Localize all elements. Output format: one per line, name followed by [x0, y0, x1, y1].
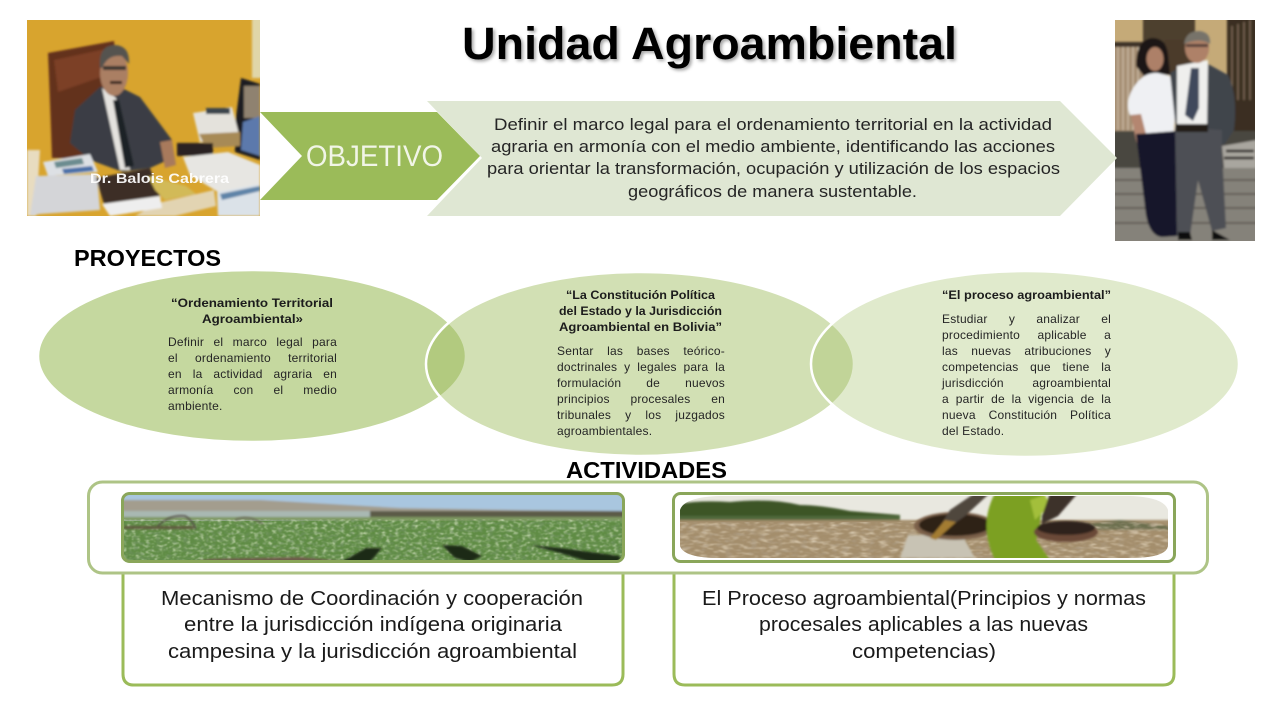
- man: [1170, 64, 1235, 145]
- activity 2 text: competencias): [852, 641, 996, 663]
- project 1 heading: [171, 298, 333, 326]
- project 1 description: Definir el marco legal para: [168, 335, 337, 349]
- hand: [160, 140, 176, 168]
- face and hair: [100, 50, 128, 96]
- heading: PROYECTOS: PROYECTOS: [74, 245, 221, 271]
- activity 1 text: campesina y la jurisdicción agroambiental: [168, 641, 577, 663]
- activity 1 text: entre la jurisdicción indígena originaria: [184, 614, 563, 636]
- project 2 description: tribunales y los juzgados: [557, 408, 725, 422]
- woman: [1136, 38, 1170, 76]
- arrow: OBJETIVO chevron: [260, 112, 480, 200]
- project 1 description: [168, 335, 337, 413]
- project 1 heading: Agroambiental»: [202, 314, 303, 326]
- crop texture: [122, 519, 624, 562]
- project 1 description: en la actividad agraria en: [168, 367, 337, 381]
- chair: [48, 41, 116, 160]
- project 2 heading: Agroambiental en Bolivia”: [559, 322, 722, 334]
- heading: ACTIVIDADES: ACTIVIDADES: [566, 457, 727, 483]
- project 2 description: Sentar las bases teórico-: [557, 344, 725, 358]
- photo: irrigated crop field: [122, 493, 624, 562]
- soil texture: [678, 522, 1170, 560]
- project 3 description: a partir de la vigencia de la: [942, 392, 1111, 406]
- project 1 description: el ordenamiento territorial: [168, 351, 337, 365]
- arrow: objective description: [427, 101, 1117, 216]
- project 3 description: las nuevas atribuciones y: [942, 344, 1111, 358]
- objective text: geográficos de manera sustentable.: [628, 182, 917, 201]
- project 3 description: competencias que tiene la: [942, 360, 1111, 374]
- project 3 description: nueva Constitución Política: [942, 408, 1111, 422]
- side papers: [193, 107, 240, 142]
- project 2 description: principios procesales en: [557, 392, 725, 406]
- project 3 description: Estudiar y analizar el: [942, 312, 1111, 326]
- project 1 description: armonía con el medio: [168, 383, 337, 397]
- project ellipses: [38, 270, 1239, 457]
- project 3 description: [942, 312, 1111, 438]
- shirt and tie: [102, 88, 130, 170]
- project 2 heading: “La Constitución Política: [566, 290, 716, 302]
- project 3 description: jurisdicción agroambiental: [942, 376, 1111, 390]
- project 2 description: formulación de nuevos: [557, 376, 725, 390]
- project 2 heading: [559, 290, 722, 334]
- photo: Dr. Balois Cabrera at his desk: [27, 18, 262, 216]
- activity 1 text: [161, 588, 583, 663]
- activities band: [88, 482, 1208, 573]
- project 2 description: [557, 344, 725, 438]
- photo: farmer pouring water on dry soil: [673, 493, 1175, 562]
- objective text: agraria en armonía con el medio ambiente, identificando las acciones: [491, 137, 1055, 156]
- project 3 description: procedimiento aplicable a: [942, 328, 1111, 342]
- activity caption boxes: [123, 570, 1174, 685]
- activity 2 text: procesales aplicables a las nuevas: [759, 614, 1088, 636]
- project 2 description: doctrinales y legales para la: [557, 360, 725, 374]
- documents: [43, 154, 98, 176]
- project 1 heading: “Ordenamiento Territorial: [171, 298, 333, 310]
- OBJETIVO label: OBJETIVO: [306, 140, 443, 173]
- project 2 description: agroambientales.: [557, 424, 652, 438]
- objective text: [487, 115, 1060, 201]
- monitor: [235, 78, 260, 160]
- objective text: Definir el marco legal para el ordenamiento territorial en la actividad: [494, 115, 1052, 134]
- photo caption: Dr. Balois Cabrera: [90, 170, 229, 186]
- project 1 description: ambiente.: [168, 399, 222, 413]
- activity 2 text: El Proceso agroambiental(Principios y normas: [702, 588, 1146, 610]
- activity 1 text: Mecanismo de Coordinación y cooperación: [161, 588, 583, 610]
- suit: [70, 87, 172, 172]
- project 2 heading: del Estado y la Jurisdicción: [559, 306, 722, 318]
- objective text: para orientar la transformación, ocupación y utilización de los espacios: [487, 159, 1060, 178]
- activity 2 text: [702, 588, 1146, 663]
- project 3 heading: “El proceso agroambiental”: [942, 290, 1111, 302]
- project 3 description: del Estado.: [942, 424, 1004, 438]
- title: Unidad Agroambiental: [462, 18, 957, 69]
- photo: couple on the steps: [1113, 18, 1257, 243]
